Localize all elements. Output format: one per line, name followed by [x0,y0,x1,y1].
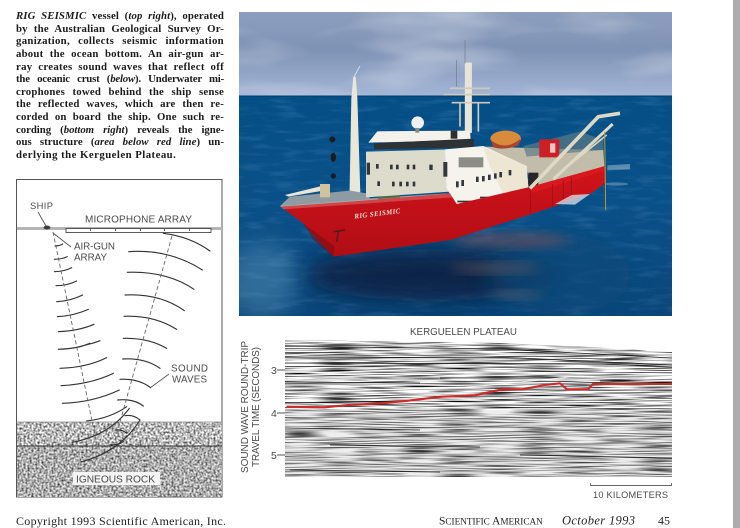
seismic record texture [285,338,672,478]
red hull [281,166,605,257]
seismic profile: Kerguelen Plateau [240,327,672,500]
y-axis title: SOUND WAVE ROUND-TRIP [240,341,251,473]
caption text: derlying the Kerguelen Plateau. [16,149,176,161]
downgoing sound waves [54,244,100,345]
diagram frame [16,180,222,497]
chart title: KERGUELEN PLATEAU [410,327,517,338]
foredeck and bow boom [280,184,450,208]
label: air-gun array: AIR-GUN [74,242,115,252]
ocean [226,96,672,318]
footer: publication and page number: S [439,516,445,528]
sound waves leader [150,374,169,388]
igneous rock label: IGNEOUS ROCK [76,474,155,486]
caption text: ray creates sound waves that reflect off [16,61,224,73]
caption text: ganization, collects seismic information [16,35,224,47]
ship marker [38,212,71,247]
photo: research vessel Rig Seismic at sea [226,12,672,318]
footer: publication and page number: October 1993 [562,514,635,528]
caption text [16,10,224,161]
lower wave fronts [58,343,160,462]
horizon line [239,96,672,97]
hull shading and lower band [280,166,605,257]
reflected sound waves [123,233,210,348]
y-axis title [240,341,262,473]
label: sound waves: WAVES [172,374,207,386]
aft deck structure [483,132,604,188]
label: ship: SHIP [30,200,53,211]
caption text: the reflected waves, which are then re- [16,98,224,110]
caption text: crophones towed behind the ship sense [16,86,224,98]
stern crane frame [530,113,620,188]
forward mast [329,66,361,204]
caption text: corded on board the ship. One such re- [16,111,224,123]
red funnel box [539,139,559,157]
right margin strip [733,0,740,528]
caption text: cording (bottom right) reveals the igne- [16,124,224,136]
y-axis ticks and values [271,365,285,462]
dashed sound ray paths [53,232,172,447]
footer: publication and page number: CIENTIFIC AMERICAN [445,516,543,528]
caption text: RIG SEISMIC vessel (top right), operated [16,10,224,22]
windows [367,162,511,202]
sediment layer [17,422,222,497]
sky [239,12,672,96]
label: sound waves: SOUND [171,364,208,374]
caption text: ous structure (area below red line) un- [16,136,224,148]
label: air-gun array: ARRAY [74,252,107,264]
caption text: by the Australian Geological Survey Or- [16,23,224,35]
rear mast with radar bars [443,40,490,133]
wake spray [555,164,630,205]
sea surface band [17,227,222,230]
ship, drawn in a 3x local grid [280,40,630,257]
label: microphone array: MICROPHONE ARRAY [85,214,192,226]
yellow pole and rigging [605,132,606,210]
footer: copyright: Copyright 1993 Scientific American, Inc. [16,514,226,528]
microphone array [66,228,211,232]
main superstructure [366,116,528,205]
lifeboat [490,131,521,149]
y-axis title: TRAVEL TIME (SECONDS) [251,347,262,467]
scale bar [590,483,672,500]
caption text: about the ocean bottom. An air-gun ar- [16,48,224,60]
y-axis ticks and values: 3 [271,365,277,377]
y-axis ticks and values: 4 [271,408,277,420]
diagram: seismic survey cross-section [16,180,222,497]
caption text: the oceanic crust (below). Underwater mi- [16,73,224,85]
red line: top of igneous structure [287,383,672,407]
footer: publication and page number: 45 [658,514,670,528]
hull name: RIG SEISMIC [353,207,401,221]
y-axis ticks and values: 5 [271,450,277,462]
scale bar: 10 KILOMETERS [593,490,668,500]
